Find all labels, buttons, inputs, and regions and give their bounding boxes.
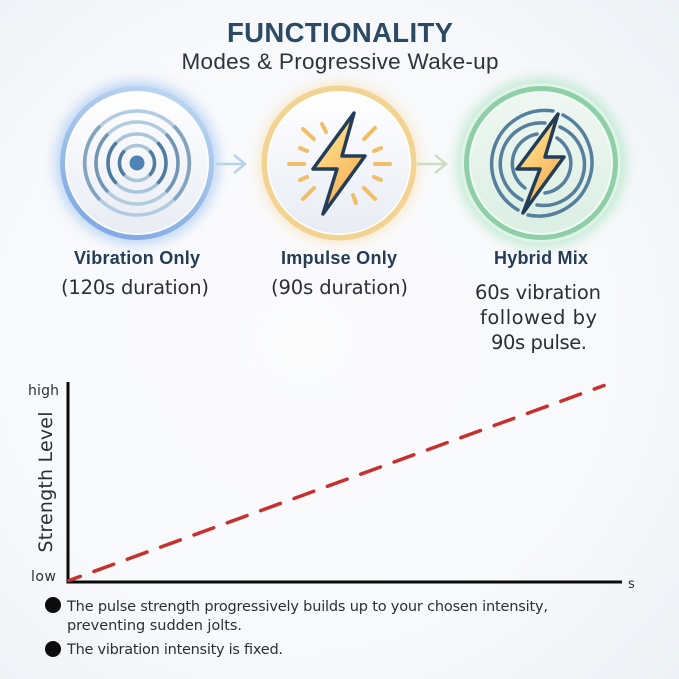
label: hybrid mix: Hybrid Mix xyxy=(494,248,588,268)
y axis label: Strength Level xyxy=(35,412,57,552)
axes xyxy=(68,382,622,582)
note: vibration intensity: The vibration intensity is fixed. xyxy=(66,642,283,658)
tick label low: low xyxy=(31,569,56,585)
label: vibration only: (120s duration) xyxy=(61,276,209,299)
chart: strength over time xyxy=(28,382,635,592)
arrow: vibration to impulse xyxy=(216,155,245,173)
label: hybrid mix: 90s pulse. xyxy=(491,331,587,354)
note: pulse strength: preventing sudden jolts. xyxy=(67,618,242,634)
note: pulse strength: The pulse strength progressively builds up to your chosen intensity, xyxy=(66,599,548,615)
note: pulse strength xyxy=(45,597,548,634)
title: FUNCTIONALITY xyxy=(227,17,453,48)
x unit label: s xyxy=(628,577,635,592)
tick label high: high xyxy=(28,383,59,399)
label: hybrid mix: followed by xyxy=(480,306,597,329)
dashed strength line xyxy=(69,386,604,580)
label: hybrid mix: 60s vibration xyxy=(475,281,601,304)
icon: impulse only xyxy=(259,83,419,243)
label: impulse only: Impulse Only xyxy=(281,248,397,268)
label: impulse only xyxy=(271,248,408,299)
arrow: impulse to hybrid xyxy=(417,155,446,173)
icon: hybrid mix xyxy=(456,78,626,248)
label: vibration only: Vibration Only xyxy=(74,248,200,268)
label: vibration only xyxy=(61,248,209,299)
label: impulse only: (90s duration) xyxy=(271,276,408,299)
icon: vibration only xyxy=(55,81,219,245)
label: hybrid mix xyxy=(475,248,601,354)
subtitle: Modes & Progressive Wake-up xyxy=(182,49,498,74)
